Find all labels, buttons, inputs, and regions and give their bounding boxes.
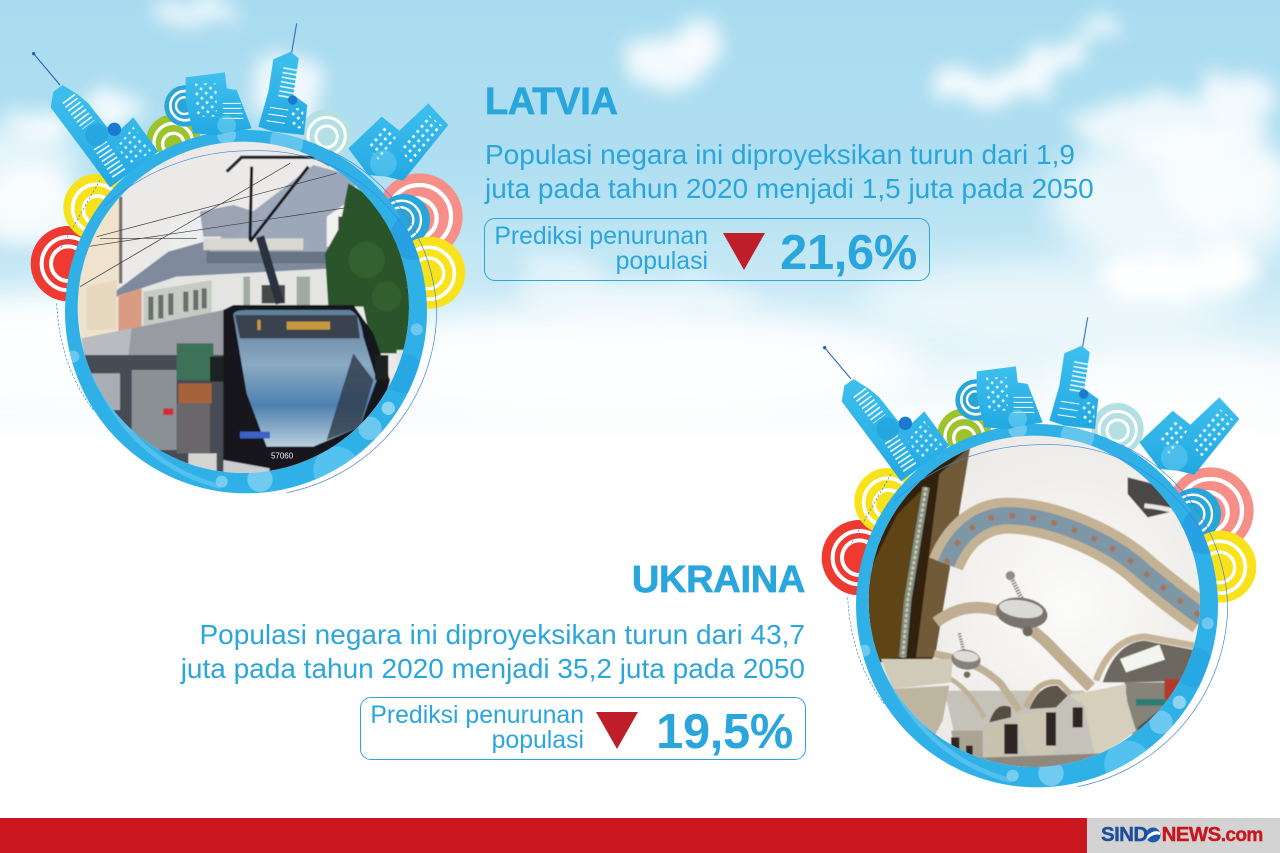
heading: Latvia: LATVIA bbox=[485, 81, 618, 123]
text: Ukraina description: juta pada tahun 2020 menjadi 35,2 juta pada 2050 bbox=[181, 653, 805, 684]
callout label: populasi bbox=[616, 248, 708, 275]
icon: red down triangle bbox=[596, 712, 638, 749]
callout label: populasi bbox=[492, 727, 584, 754]
blue ring and city skyline bbox=[823, 317, 1239, 787]
figure: 21,6%: 21,6% bbox=[780, 226, 917, 280]
footer red band bbox=[0, 818, 1087, 853]
footer logo panel bbox=[1087, 818, 1280, 853]
badge: Ukraina bbox=[822, 317, 1256, 787]
decorative ring circles bbox=[822, 379, 1256, 603]
badge: Latvia bbox=[31, 23, 465, 493]
callout: Latvia population decline bbox=[484, 218, 930, 281]
callout label bbox=[370, 702, 584, 754]
icon: red down triangle bbox=[723, 233, 765, 270]
callout label: Prediksi penurunan bbox=[494, 223, 708, 250]
text: Latvia description: Populasi negara ini diproyeksikan turun dari 1,9 bbox=[485, 139, 1075, 170]
figure: 19,5%: 19,5% bbox=[656, 705, 793, 759]
callout label: Prediksi penurunan bbox=[370, 702, 584, 729]
text: Latvia description bbox=[484, 139, 1094, 204]
icon: logo globe bbox=[1146, 828, 1160, 842]
text: Ukraina description bbox=[180, 619, 805, 684]
blue ring and city skyline bbox=[32, 23, 448, 493]
footer logo wordmark: SIND NEWS.com bbox=[1101, 823, 1263, 846]
text: Ukraina description: Populasi negara ini diproyeksikan turun dari 43,7 bbox=[200, 619, 805, 650]
callout: Ukraina population decline bbox=[360, 697, 806, 760]
photo: Kyiv metro station bbox=[861, 427, 1208, 777]
photo: tram in Latvia: 57060 bbox=[271, 452, 294, 461]
heading: Ukraina: UKRAINA bbox=[632, 559, 805, 601]
callout label bbox=[494, 223, 708, 275]
photo: tram in Latvia bbox=[70, 133, 417, 483]
text: Latvia description: juta pada tahun 2020 menjadi 1,5 juta pada 2050 bbox=[485, 173, 1094, 204]
decorative ring circles bbox=[31, 85, 465, 309]
